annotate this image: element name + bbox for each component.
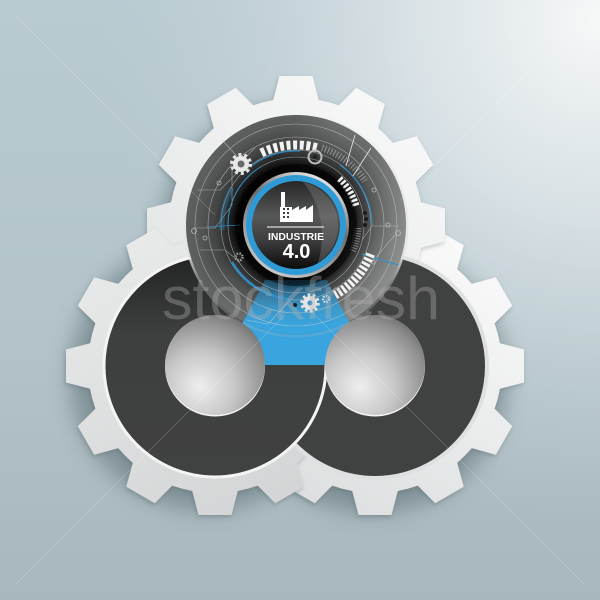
icon: small gear left bbox=[236, 254, 242, 260]
white radial lines bbox=[346, 135, 371, 176]
circuit rings bbox=[193, 124, 398, 326]
glass reflection bbox=[303, 182, 338, 263]
top disc bbox=[184, 112, 408, 338]
watermark text: stockfresh bbox=[162, 265, 440, 332]
dark dots bbox=[293, 211, 368, 307]
right gear dark ring bbox=[261, 252, 489, 480]
gear: left bbox=[64, 230, 306, 518]
icon: ring gear top bbox=[308, 150, 322, 164]
central button bbox=[243, 172, 349, 278]
disc body bbox=[186, 115, 406, 335]
dark face bbox=[252, 181, 340, 269]
label: 4.0: 4.0 bbox=[283, 241, 310, 263]
blue wedge seen through disc bbox=[244, 280, 348, 335]
blue ring bbox=[246, 175, 346, 275]
icon: factory bbox=[280, 192, 313, 222]
fine dark ticks bbox=[322, 148, 365, 181]
icon: small gear bottom bbox=[302, 296, 318, 310]
disc rim bbox=[184, 112, 408, 338]
divider line bbox=[267, 226, 324, 228]
white tick arcs bbox=[261, 145, 371, 295]
silver bezel bbox=[243, 172, 349, 278]
disc gloss bbox=[186, 115, 406, 335]
left gear hole bbox=[165, 315, 265, 416]
circuit nodes bbox=[192, 181, 400, 264]
button shadow ring bbox=[235, 164, 357, 286]
label: INDUSTRIE: INDUSTRIE bbox=[268, 231, 324, 243]
icon: tiny blue gear bottom bbox=[323, 296, 329, 302]
blue connector bbox=[240, 300, 352, 365]
gear: right bbox=[293, 234, 524, 518]
gear: top bbox=[144, 76, 446, 261]
blue arcs bbox=[206, 151, 398, 299]
right gear hole bbox=[325, 315, 425, 416]
left gear dark ring bbox=[102, 254, 328, 478]
ground shadow of gears bbox=[70, 107, 507, 513]
icon: small gear upper left bbox=[232, 156, 250, 172]
